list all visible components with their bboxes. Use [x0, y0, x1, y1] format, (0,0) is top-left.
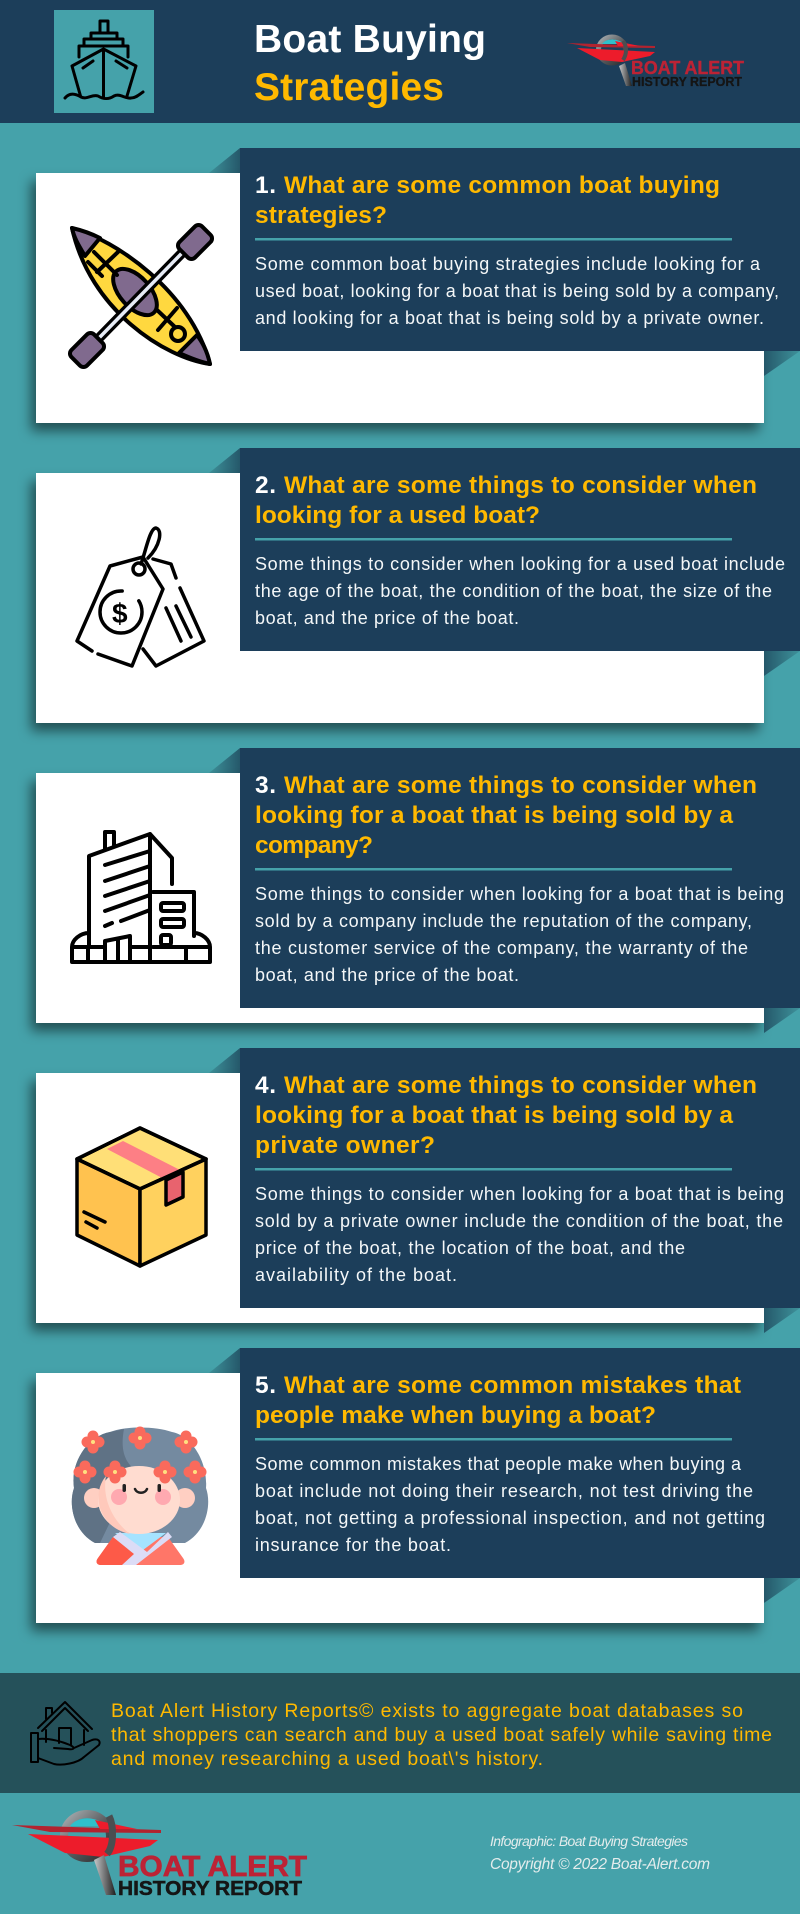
icon: kayak and paddle — [68, 223, 214, 369]
panel content: Some common boat buying strategies include looking for a — [255, 254, 761, 274]
panel content: boat, not getting a professional inspection, and not getting — [255, 1508, 765, 1528]
panel content: 4. — [255, 1072, 276, 1099]
callout text: Boat Alert History Reports© exists to aggregate boat databases so — [111, 1700, 743, 1722]
panel: question 1 — [36, 148, 800, 423]
panel content — [240, 448, 800, 651]
panel content: private owner? — [255, 1132, 435, 1159]
panel content: What are some things to consider when — [284, 1072, 757, 1099]
panel content: used boat, looking for a boat that is being sold by a company, — [255, 281, 779, 301]
panel content: the customer service of the company, the warranty of the — [255, 938, 748, 958]
title — [254, 18, 486, 109]
logo: Boat Alert header — [567, 37, 744, 89]
panel: question 2 — [36, 448, 800, 723]
panel content: 5. — [255, 1372, 276, 1399]
callout text — [111, 1700, 772, 1770]
panel content: Some things to consider when looking for a boat that is being — [255, 1184, 784, 1204]
panel content: boat, and the price of the boat. — [255, 608, 519, 628]
panel content: boat include not doing their research, not test driving the — [255, 1481, 753, 1501]
logo: Boat Alert footer: BOAT ALERT — [118, 1851, 307, 1883]
panel content: Some things to consider when looking for a used boat include — [255, 554, 785, 574]
panel content — [240, 1348, 800, 1578]
panel content: sold by a private owner include the condition of the boat, the — [255, 1211, 783, 1231]
footer credits: Copyright © 2022 Boat-Alert.com — [490, 1856, 710, 1873]
callout band — [0, 1673, 800, 1793]
panel content: company? — [255, 832, 373, 859]
footer credits: Infographic: Boat Buying Strategies — [490, 1833, 688, 1849]
logo: Boat Alert footer — [12, 1814, 307, 1900]
panel content: looking for a boat that is being sold by a — [255, 1102, 733, 1129]
panel content — [240, 748, 800, 1008]
panel: question 4 — [36, 1048, 800, 1333]
header band — [0, 0, 800, 123]
icon: house in hand — [31, 1702, 100, 1765]
logo: Boat Alert header: HISTORY REPORT — [632, 74, 742, 89]
icon: price tags: $ — [112, 598, 128, 629]
panel content: 1. — [255, 172, 276, 199]
panel content: people make when buying a boat? — [255, 1402, 656, 1429]
panel content: looking for a boat that is being sold by a — [255, 802, 733, 829]
panel content: looking for a used boat? — [255, 502, 540, 529]
callout text: that shoppers can search and buy a used boat safely while saving time — [111, 1724, 772, 1746]
panel content: Some things to consider when looking for a boat that is being — [255, 884, 784, 904]
panel: question 5 — [36, 1348, 800, 1623]
panel content: 2. — [255, 472, 276, 499]
icon: price tags — [77, 528, 204, 666]
panel content: availability of the boat. — [255, 1265, 457, 1285]
title: Boat Buying — [254, 18, 486, 61]
panel content: insurance for the boat. — [255, 1535, 451, 1555]
title: Strategies — [254, 66, 444, 109]
panel content: and looking for a boat that is being sold by a private owner. — [255, 308, 764, 328]
panel content: 3. — [255, 772, 276, 799]
icon: ship — [54, 10, 154, 113]
panel content: boat, and the price of the boat. — [255, 965, 519, 985]
footer credits — [490, 1833, 710, 1873]
panel content: strategies? — [255, 202, 387, 229]
panel content: What are some things to consider when — [284, 472, 757, 499]
icon: cardboard box — [77, 1128, 206, 1266]
panel content: sold by a company include the reputation of the company, — [255, 911, 752, 931]
callout text: and money researching a used boat\'s history. — [111, 1748, 543, 1770]
panel content: What are some common boat buying — [284, 172, 720, 199]
icon: girl with flowers — [72, 1426, 208, 1565]
logo: Boat Alert header: BOAT ALERT — [631, 58, 744, 78]
panel content: What are some things to consider when — [284, 772, 757, 799]
panel: question 3 — [36, 748, 800, 1033]
panel content: the age of the boat, the condition of the boat, the size of the — [255, 581, 772, 601]
logo: Boat Alert footer: HISTORY REPORT — [118, 1878, 302, 1900]
panel content — [240, 1048, 800, 1308]
panel content: What are some common mistakes that — [284, 1372, 741, 1399]
panel content: Some common mistakes that people make when buying a — [255, 1454, 742, 1474]
panel content — [240, 148, 800, 351]
panel content: price of the boat, the location of the boat, and the — [255, 1238, 685, 1258]
icon: office building — [72, 832, 210, 962]
